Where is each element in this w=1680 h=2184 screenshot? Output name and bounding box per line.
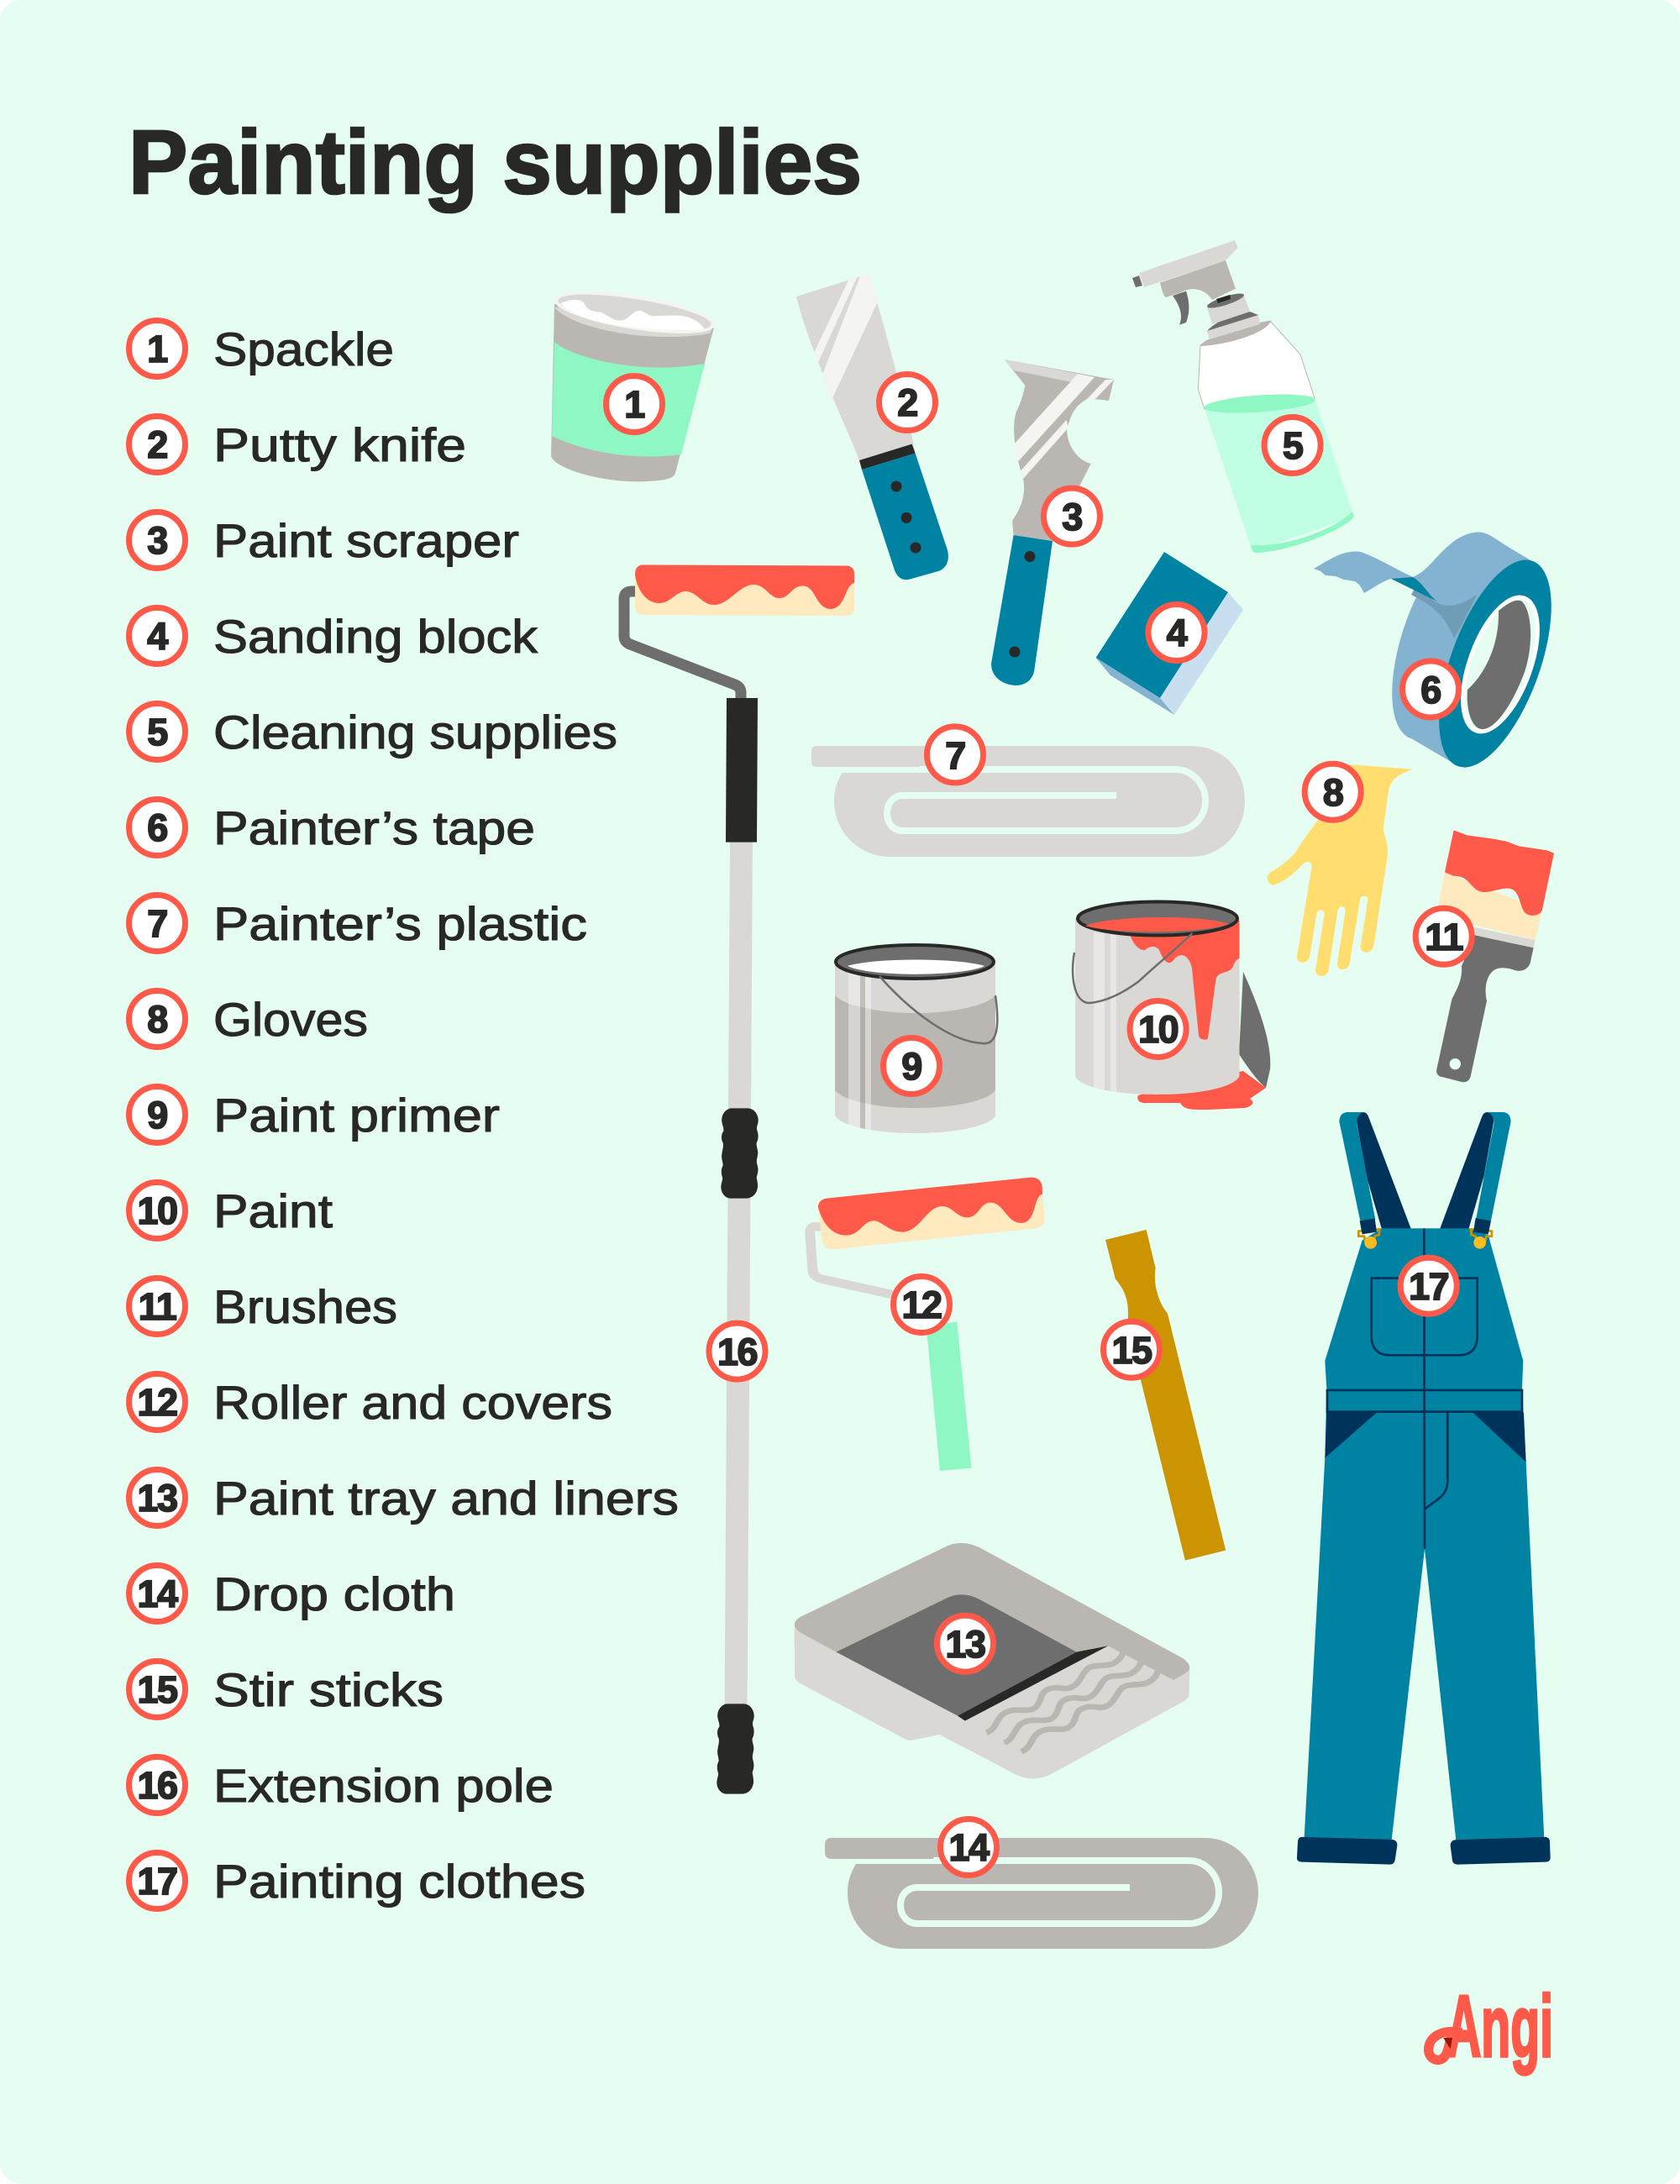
legend item 8 [129, 991, 368, 1047]
legend item 12: Roller and covers [213, 1376, 612, 1429]
legend item 1: Spackle [213, 323, 394, 375]
icon: roller and cover [810, 1178, 1045, 1471]
legend item 4 [129, 608, 538, 664]
icon: sanding block: 4 [1167, 612, 1188, 654]
icon: roller and cover: 12 [901, 1284, 942, 1326]
legend item 5: 5 [147, 711, 167, 753]
legend item 14: Drop cloth [213, 1567, 455, 1620]
icon: painter's plastic [811, 727, 1245, 857]
legend item 3: Paint scraper [213, 514, 519, 567]
icon: extension pole with roller: 16 [717, 1331, 757, 1373]
legend item 1 [129, 321, 394, 376]
icon: sanding block [1096, 552, 1243, 715]
legend item 10: 10 [137, 1189, 177, 1232]
legend item 17 [129, 1853, 585, 1908]
icon: extension pole with roller [624, 564, 854, 1794]
legend item 15 [129, 1662, 444, 1717]
legend item 14 [129, 1566, 455, 1621]
icon: spray bottle cleaning supplies [1132, 240, 1354, 553]
title: Painting supplies [129, 111, 862, 213]
legend item 2 [129, 417, 466, 472]
legend item 7 [129, 895, 587, 951]
legend item 10 [129, 1183, 333, 1238]
icon: painter's tape roll [1314, 518, 1574, 781]
icon: paint primer can [835, 945, 997, 1133]
legend item 7: 7 [147, 902, 167, 945]
logo: Angi [1429, 1978, 1553, 2076]
legend item 17: 17 [137, 1860, 177, 1903]
legend item 15: 15 [137, 1668, 177, 1711]
icon: overalls painting clothes: 17 [1409, 1265, 1449, 1308]
icon: paint brush: 11 [1425, 916, 1462, 958]
legend item 2: 2 [147, 423, 167, 466]
legend item 16 [129, 1757, 554, 1813]
legend item 16: Extension pole [213, 1759, 554, 1812]
legend item 1: 1 [147, 328, 167, 370]
icon: paint tray and liner: 13 [945, 1623, 985, 1666]
legend item 11: Brushes [213, 1280, 397, 1333]
icon: paint can with drips [1073, 902, 1270, 1110]
icon: paint brush [1415, 830, 1554, 1082]
legend item 17: Painting clothes [213, 1855, 585, 1908]
legend item 3: 3 [147, 519, 167, 562]
icon: putty knife [796, 274, 948, 580]
icon: stir stick: 15 [1111, 1329, 1152, 1372]
legend item 2: Putty knife [213, 418, 466, 471]
icon: glove [1268, 764, 1413, 976]
legend item 12: 12 [137, 1381, 177, 1424]
icon: drop cloth: 14 [948, 1826, 990, 1869]
legend item 6: 6 [147, 806, 167, 849]
legend item 3 [129, 512, 519, 568]
legend item 4: 4 [147, 615, 168, 658]
legend item 6 [129, 800, 535, 855]
legend item 11: 11 [139, 1285, 176, 1328]
icon: paint can with drips: 10 [1138, 1008, 1179, 1051]
legend item 8: 8 [147, 998, 167, 1041]
legend item 14: 14 [137, 1572, 178, 1615]
legend item 13: 13 [137, 1477, 177, 1520]
icon: spray bottle cleaning supplies: 5 [1283, 424, 1303, 467]
legend item 13: Paint tray and liners [213, 1472, 679, 1525]
icon: paint primer can: 9 [901, 1045, 921, 1088]
icon: glove: 8 [1323, 771, 1343, 814]
icon: paint scraper: 3 [1062, 496, 1082, 538]
icon: painter's tape roll: 6 [1420, 669, 1441, 711]
legend item 10: Paint [213, 1184, 333, 1237]
legend item 7: Painter’s plastic [213, 897, 587, 950]
legend item 5: Cleaning supplies [213, 706, 617, 759]
legend item 8: Gloves [213, 993, 368, 1046]
icon: paint tray and liner [795, 1543, 1189, 1778]
icon: drop cloth [825, 1819, 1258, 1949]
legend item 9: 9 [147, 1094, 167, 1137]
icon: overalls painting clothes [1297, 1112, 1551, 1865]
legend item 11 [129, 1278, 397, 1334]
legend item 15: Stir sticks [213, 1663, 444, 1716]
icon: putty knife: 2 [897, 381, 917, 424]
logo: Angi: Angi [1446, 1978, 1553, 2076]
legend item 4: Sanding block [213, 610, 538, 663]
legend list [129, 321, 679, 1908]
icon: stir stick [1104, 1230, 1226, 1561]
icon: spackle tub: 1 [624, 383, 644, 426]
legend item 16: 16 [137, 1764, 177, 1807]
legend item 6: Painter’s tape [213, 801, 535, 854]
legend item 9 [129, 1087, 500, 1142]
legend item 9: Paint primer [213, 1089, 500, 1142]
icon: painter's plastic: 7 [945, 734, 965, 777]
icon: paint scraper [991, 360, 1114, 685]
icon: spackle tub [551, 283, 717, 481]
